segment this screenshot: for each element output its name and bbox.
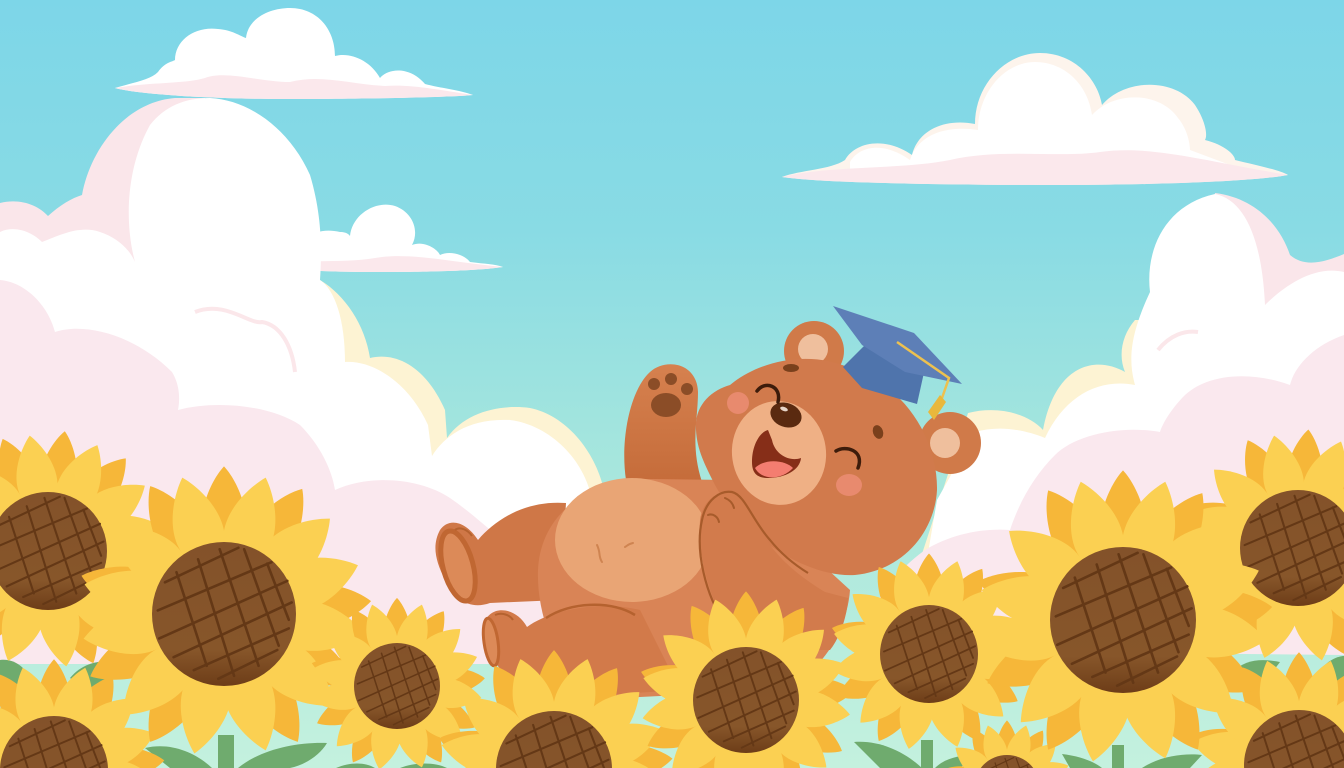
belly fold marks — [597, 543, 633, 562]
flower: in front of bear — [637, 591, 856, 768]
mouth and tongue — [752, 430, 801, 478]
muzzle — [725, 395, 833, 511]
cloud: middle small — [266, 205, 503, 272]
pale lump outline — [1158, 332, 1198, 350]
white cloud mass — [920, 194, 1344, 600]
flower: right back — [1169, 419, 1344, 674]
cloud bank: left — [0, 98, 620, 664]
front arm — [700, 492, 848, 650]
right ear — [919, 412, 981, 474]
cloud: top right — [782, 53, 1288, 185]
lower leg and foot — [481, 605, 680, 698]
upper leg and foot — [434, 503, 566, 605]
flower: bottom left — [0, 659, 166, 768]
cream cloud rim — [920, 320, 1200, 560]
flower: large left — [76, 466, 373, 759]
pink lower cloud — [850, 335, 1344, 655]
pale lump outline — [195, 309, 295, 372]
flower: right of bear — [828, 554, 1030, 752]
cheeks — [727, 392, 862, 496]
hand contour line — [700, 492, 808, 625]
bear — [434, 306, 981, 698]
body torso — [538, 479, 850, 698]
left ear — [784, 321, 844, 381]
flower: small centre left — [308, 598, 486, 768]
belly patch — [555, 478, 709, 602]
cloud: top left small — [115, 8, 473, 99]
flower: bottom centre — [434, 650, 674, 768]
cloud bank: right — [850, 193, 1344, 655]
flower: bottom right — [1186, 652, 1344, 768]
nose — [767, 398, 805, 432]
raised arm and paw — [624, 364, 702, 482]
graduation cap — [833, 306, 962, 420]
brow dots — [783, 364, 885, 440]
flower: tiny bottom — [939, 720, 1075, 768]
pink tower rim — [0, 98, 205, 300]
leaves and stems — [0, 656, 1344, 768]
pink lower cloud — [0, 280, 620, 664]
closed eyes — [757, 385, 859, 468]
head — [696, 359, 937, 575]
hand finger marks — [708, 498, 734, 522]
cream cloud rim — [300, 280, 604, 560]
white cloud mass — [0, 98, 592, 600]
pink tower rim — [1200, 193, 1344, 330]
flower: left back — [0, 414, 186, 685]
flower: large right — [973, 470, 1274, 767]
